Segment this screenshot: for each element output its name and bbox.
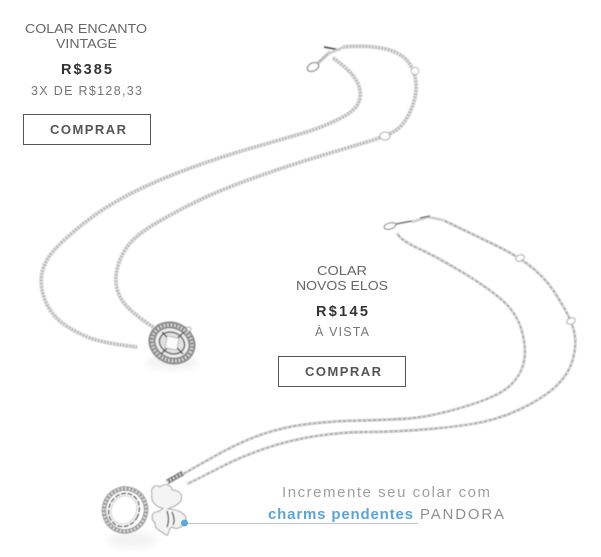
necklace: curb chain with round pendant	[41, 46, 419, 369]
callout text line 2: PANDORA	[420, 506, 504, 523]
installments: 3X DE R$128,33	[31, 84, 142, 98]
callout leader line	[184, 522, 418, 524]
chain: inner strand	[116, 46, 416, 327]
product name: COLAR ENCANTO	[25, 22, 147, 36]
callout text line 1: Incremente seu colar com	[282, 484, 490, 501]
icon: station links and clasp	[306, 46, 419, 140]
callout text line 2: charms pendentes	[268, 506, 413, 523]
icon: station links and clasp	[383, 216, 576, 325]
callout text line 2	[268, 506, 504, 523]
product name	[296, 264, 388, 293]
product name: COLAR	[317, 264, 367, 278]
product name: NOVOS ELOS	[296, 279, 388, 293]
chain: inner strand	[183, 233, 525, 474]
price: R$145	[316, 304, 368, 320]
chain: outer strand	[41, 58, 360, 347]
product info: Colar Novos Elos	[278, 264, 406, 386]
icon: ring charm	[98, 483, 158, 547]
button: comprar: COMPRAR	[50, 122, 127, 137]
callout dot	[181, 520, 188, 526]
icon: round pave pendant	[146, 318, 198, 369]
payment note: À VISTA	[315, 324, 370, 339]
product name	[25, 22, 147, 51]
button: comprar: COMPRAR	[305, 364, 382, 379]
callout: charms pendentes	[181, 484, 504, 526]
product name: VINTAGE	[56, 37, 117, 51]
necklace: cable chain with charms	[98, 216, 576, 547]
chain: outer strand	[187, 220, 575, 484]
product info: Colar Encanto Vintage	[24, 22, 150, 144]
price: R$385	[61, 62, 112, 78]
icon: clover charm	[152, 473, 186, 535]
